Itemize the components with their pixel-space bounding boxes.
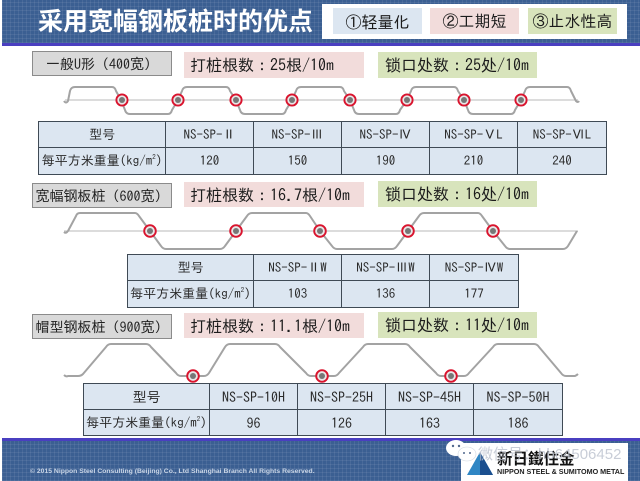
table: U type: 210 [464, 154, 483, 167]
advantage: short schedule: ②工期短 [442, 13, 506, 29]
advantage: water sealing: ③止水性高 [532, 13, 612, 29]
table: wide type: 每平方米重量(kg/m2) [130, 287, 251, 300]
section label: wide type [32, 183, 172, 208]
table: U type: 型号 [89, 128, 115, 140]
table: U type: NS-SP-Ⅲ [272, 128, 324, 140]
table: wide type: 136 [376, 287, 395, 300]
header band [2, 0, 640, 46]
diagram: hat sheet pile [63, 343, 579, 383]
icon: chat bubbles [446, 440, 476, 462]
advantage: light weight: ①轻量化 [345, 14, 410, 30]
table: U type: NS-SP-ⅥL [533, 128, 591, 140]
table: wide type: 型号 [178, 260, 204, 274]
table: hat type: 186 [508, 416, 528, 430]
company logo [461, 443, 628, 481]
table: hat type: 96 [246, 416, 260, 430]
table: hat type: 每平方米重量(kg/m2) [86, 415, 207, 428]
diagram: U type sheet pile [63, 86, 580, 115]
section label: U type [32, 51, 172, 76]
company name: 新日鐵住金 [497, 447, 575, 469]
table: wide type: 103 [288, 287, 307, 300]
table: U type: NS-SP-ⅤL [444, 128, 503, 140]
advantage: short schedule [430, 8, 519, 34]
section label: hat type [32, 314, 172, 339]
lock count: U type [378, 52, 537, 78]
lock count: U type: 锁口处数：25处/10m [385, 57, 529, 73]
lock count: wide type [378, 181, 537, 207]
table: U type: NS-SP-Ⅱ [184, 128, 236, 140]
section label: U type: 一般U形（400宽） [46, 56, 158, 70]
table: hat type: 163 [419, 416, 440, 430]
section label: wide type: 宽幅钢板桩（600宽） [36, 188, 168, 202]
watermark text: 微信号：hb64506452 [478, 446, 621, 463]
icon: mountain mark [467, 452, 493, 475]
table: wide type: NS-SP-ⅣW [445, 260, 503, 274]
lock count: hat type [378, 312, 537, 338]
company name in English: NIPPON STEEL & SUMITOMO METAL [497, 467, 624, 476]
table: U type: 120 [200, 154, 219, 167]
lock count: hat type: 锁口处数：11处/10m [385, 317, 529, 333]
table: hat type: 型号 [132, 390, 160, 404]
lock count: wide type: 锁口处数：16处/10m [385, 186, 529, 202]
pile count: hat type: 打桩根数：11.1根/10m [190, 318, 350, 334]
footer band [2, 438, 640, 481]
table: U type: NS-SP-Ⅳ [360, 128, 412, 140]
advantages panel [322, 4, 627, 39]
table: wide type: NS-SP-ⅡW [268, 260, 327, 274]
table: hat type: NS-SP-50H [486, 390, 550, 404]
watermark [446, 440, 621, 463]
table: hat type [83, 383, 563, 436]
table: hat type: NS-SP-10H [222, 390, 285, 404]
diagram: wide sheet pile [63, 212, 578, 250]
pile count: wide type: 打桩根数：16.7根/10m [190, 186, 350, 202]
table: wide type [127, 254, 519, 308]
pile count: U type: 打桩根数：25根/10m [190, 57, 334, 73]
section label: hat type: 帽型钢板桩（900宽） [36, 320, 168, 334]
advantage: water sealing [528, 8, 617, 34]
pile count: hat type [184, 313, 364, 338]
advantage: light weight [333, 8, 422, 34]
table: U type: 150 [288, 154, 307, 167]
table: U type: 240 [552, 154, 572, 167]
pile count: wide type [184, 182, 364, 207]
copyright: © 2015 Nippon Steel Consulting (Beijing) Co., Ltd Shanghai Branch All Rights Reserved. [30, 468, 315, 475]
table: hat type: 126 [331, 416, 352, 430]
table: wide type: 177 [464, 287, 484, 300]
pile count: U type [184, 52, 364, 78]
table: U type: 190 [376, 154, 395, 167]
table: wide type: NS-SP-ⅢW [356, 260, 415, 274]
table: hat type: NS-SP-45H [398, 390, 461, 404]
table: U type [38, 121, 607, 175]
title: 采用宽幅钢板桩时的优点 [38, 8, 313, 36]
table: U type: 每平方米重量(kg/m2) [42, 154, 162, 167]
table: hat type: NS-SP-25H [310, 390, 373, 404]
